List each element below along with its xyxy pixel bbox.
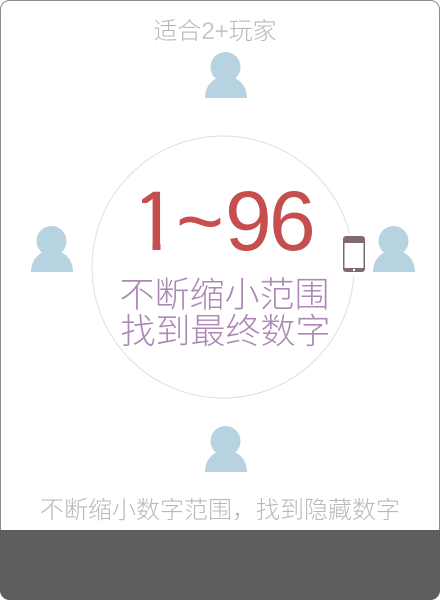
text: find the number: 找到最终数字 bbox=[120, 312, 331, 352]
number range: 9 bbox=[225, 174, 272, 268]
text: narrow the range: 不断缩小范围 bbox=[119, 276, 330, 315]
circle bbox=[92, 136, 354, 398]
number range bbox=[142, 191, 312, 251]
caption: 不断缩小数字范围，找到隐藏数字 bbox=[40, 497, 400, 524]
icon: player top bbox=[205, 52, 247, 98]
number range: ~ bbox=[176, 174, 224, 268]
heading: players: 适合2+玩家 bbox=[153, 18, 277, 45]
icon: player bottom bbox=[205, 426, 247, 472]
icon: player left bbox=[31, 226, 73, 272]
number range: 6 bbox=[269, 174, 316, 268]
icon: phone bbox=[341, 233, 367, 276]
number range: 1 bbox=[132, 174, 178, 268]
icon: player right bbox=[373, 226, 415, 272]
